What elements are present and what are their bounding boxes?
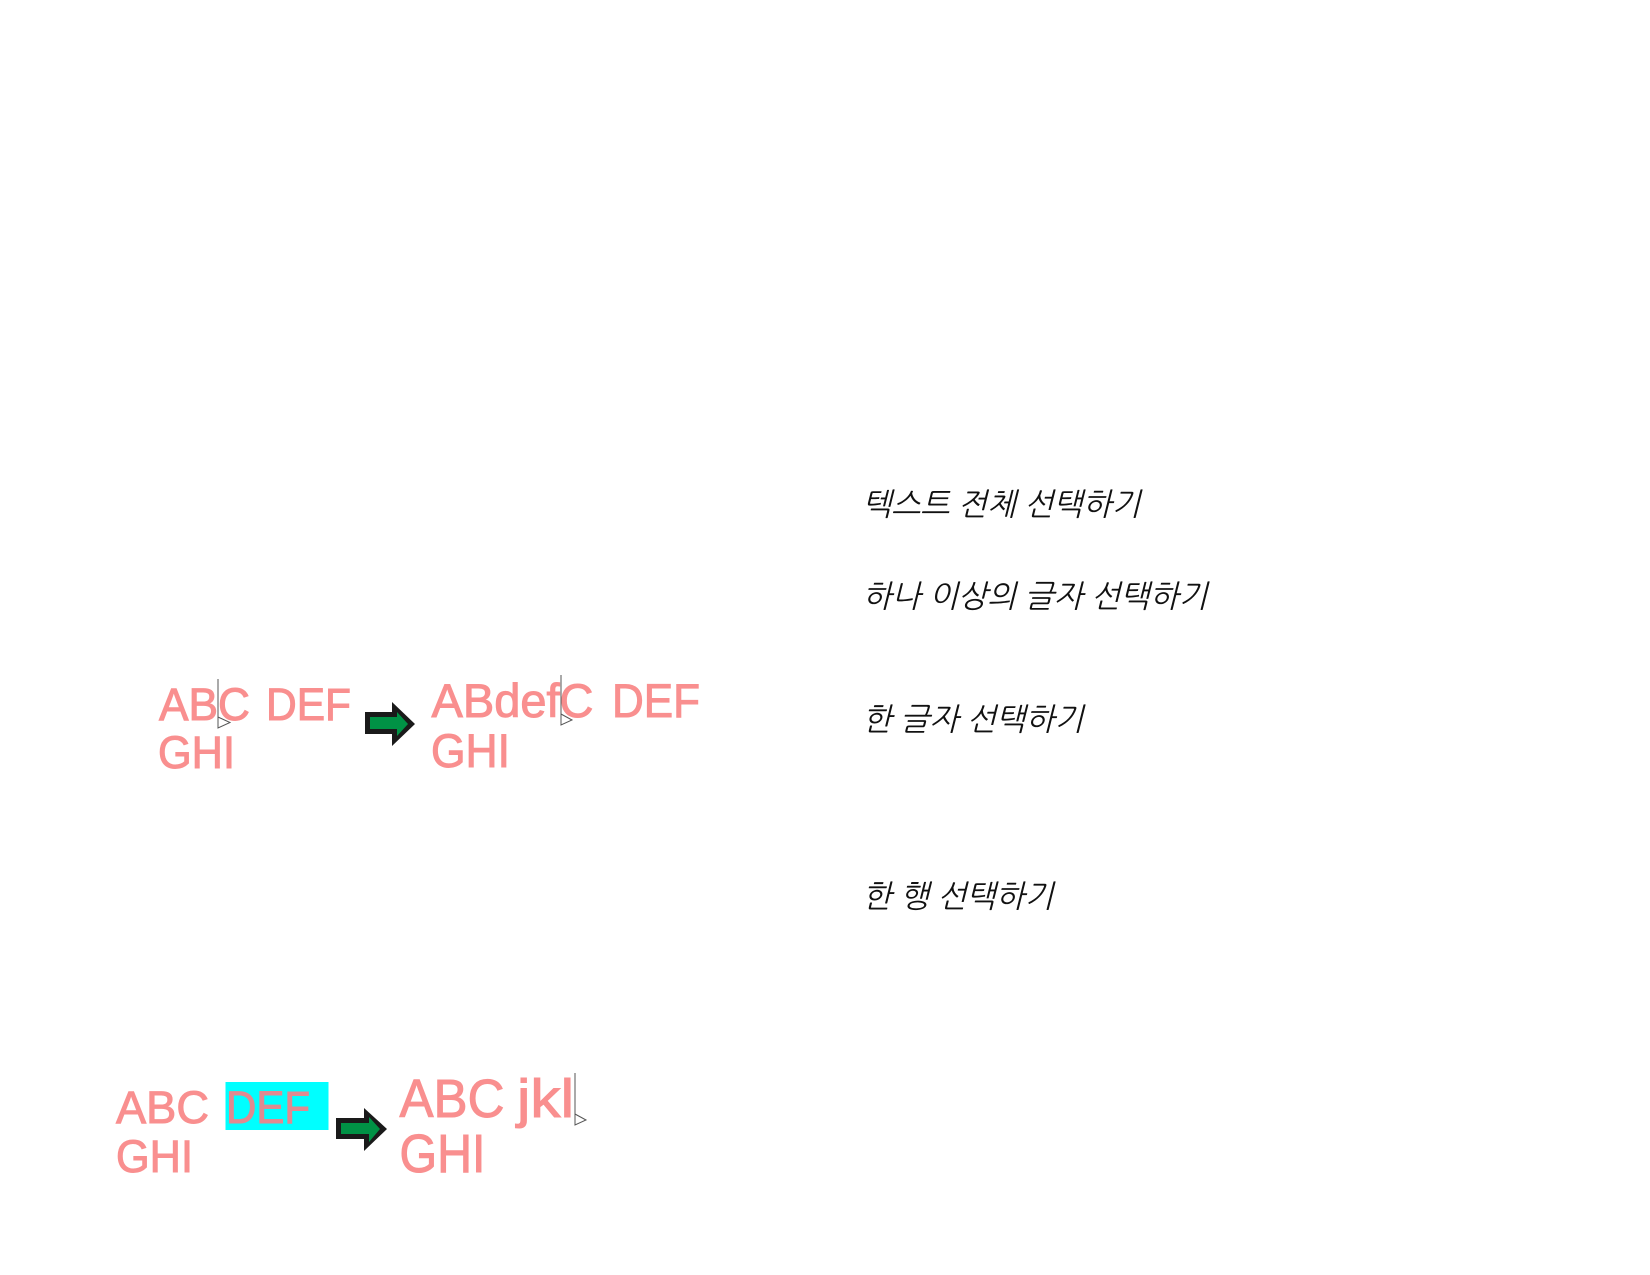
arrow: replace example (336, 1108, 387, 1151)
example: replace selection, after (400, 1069, 586, 1184)
example: insert text, after: DEF (612, 675, 700, 728)
example: replace selection, before: DEF (226, 1082, 310, 1133)
selection highlight (226, 1082, 328, 1130)
example: insert text, after (431, 675, 700, 778)
example: insert text, after: GHI (431, 725, 510, 778)
example: replace selection, before: GHI (116, 1131, 193, 1182)
example: replace selection, after: GHI (400, 1124, 486, 1184)
example: insert text, before: GHI (158, 727, 235, 778)
example: insert text, before: DEF (266, 679, 351, 730)
label: select one or more characters: 하나 이상의 글자 선택하기 (862, 579, 1210, 614)
example: insert text, before (158, 679, 351, 778)
label: select one character: 한 글자 선택하기 (862, 702, 1086, 737)
example: replace selection, before (116, 1082, 328, 1182)
example: insert text, after: ABdefC (432, 675, 594, 728)
arrow: insert example (365, 702, 415, 746)
label: select all text: 텍스트 전체 선택하기 (862, 487, 1143, 522)
example: insert text, before: ABC (159, 679, 250, 730)
label: select one line: 한 행 선택하기 (862, 879, 1056, 914)
example: replace selection, after: jkl (515, 1069, 574, 1129)
example: replace selection, before: ABC (116, 1082, 209, 1133)
example: replace selection, after: ABC (400, 1069, 504, 1129)
